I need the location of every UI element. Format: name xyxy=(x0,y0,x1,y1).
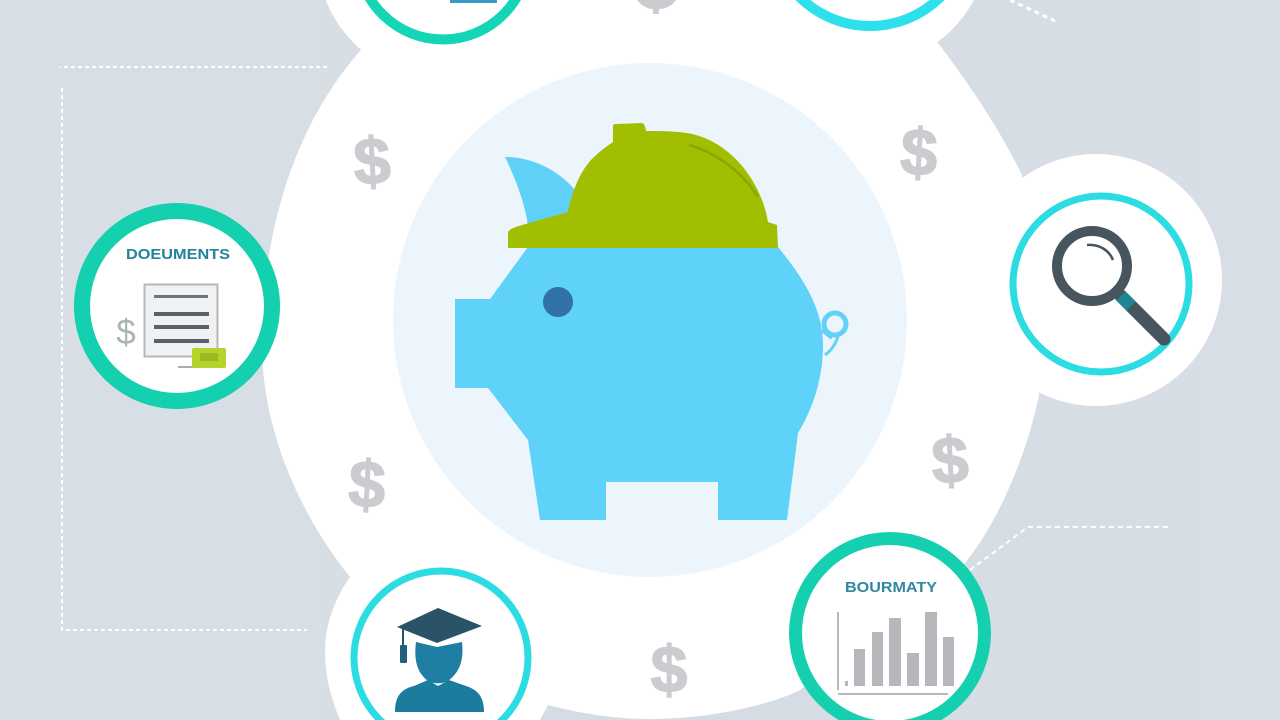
graduate head xyxy=(415,642,462,683)
cap tassel xyxy=(400,628,407,663)
teal ring xyxy=(82,211,272,401)
green hard hat xyxy=(508,123,778,248)
dollar sign: bottom: $ xyxy=(651,632,687,706)
icon base bar xyxy=(450,0,497,3)
piggy bank with hard hat xyxy=(455,123,846,520)
magnifier handle xyxy=(1121,296,1164,339)
teal ring xyxy=(796,538,984,720)
lens highlight xyxy=(1087,245,1113,260)
panel: top left node backing xyxy=(317,0,569,80)
pig ear xyxy=(505,157,575,225)
chart label: BOURMATY xyxy=(845,579,937,596)
node: top left partial ring xyxy=(358,0,528,40)
panel: large white hub shape xyxy=(262,0,1039,719)
green banknote xyxy=(178,348,226,368)
pig tail xyxy=(822,313,846,355)
thin dollar sign: $ xyxy=(116,313,136,352)
magnifier lens xyxy=(1057,231,1127,301)
dollar sign: lower right: $ xyxy=(930,422,970,498)
node: documents xyxy=(82,211,272,401)
dollar sign: upper right: $ xyxy=(899,114,939,190)
dollar sign remnant: top edge xyxy=(637,0,676,14)
node: top right partial ring xyxy=(770,0,970,26)
cyan ring xyxy=(770,0,970,26)
dollar sign: lower left: $ xyxy=(347,446,387,522)
panel: top right node backing xyxy=(735,0,989,67)
teal ring xyxy=(358,0,528,40)
documents label: DOEUMENTS xyxy=(126,246,230,263)
pig eye xyxy=(543,287,573,317)
magnifier collar xyxy=(1121,296,1131,306)
bar chart xyxy=(837,612,954,695)
panel: bottom left node backing xyxy=(325,577,548,720)
node: bar chart xyxy=(796,538,984,720)
panel: right node backing xyxy=(970,154,1222,406)
graduate shoulders xyxy=(395,680,484,712)
graduation cap xyxy=(397,608,482,643)
document sheet icon xyxy=(144,284,218,356)
cyan ring xyxy=(1013,196,1189,372)
panel: pale centre disc xyxy=(393,63,907,577)
cyan ring xyxy=(354,571,528,720)
node: magnifying glass xyxy=(1013,196,1189,372)
dollar sign: upper left: $ xyxy=(352,123,392,199)
hat highlight line xyxy=(689,145,758,197)
node: graduate xyxy=(354,571,528,720)
pig body xyxy=(455,247,823,520)
